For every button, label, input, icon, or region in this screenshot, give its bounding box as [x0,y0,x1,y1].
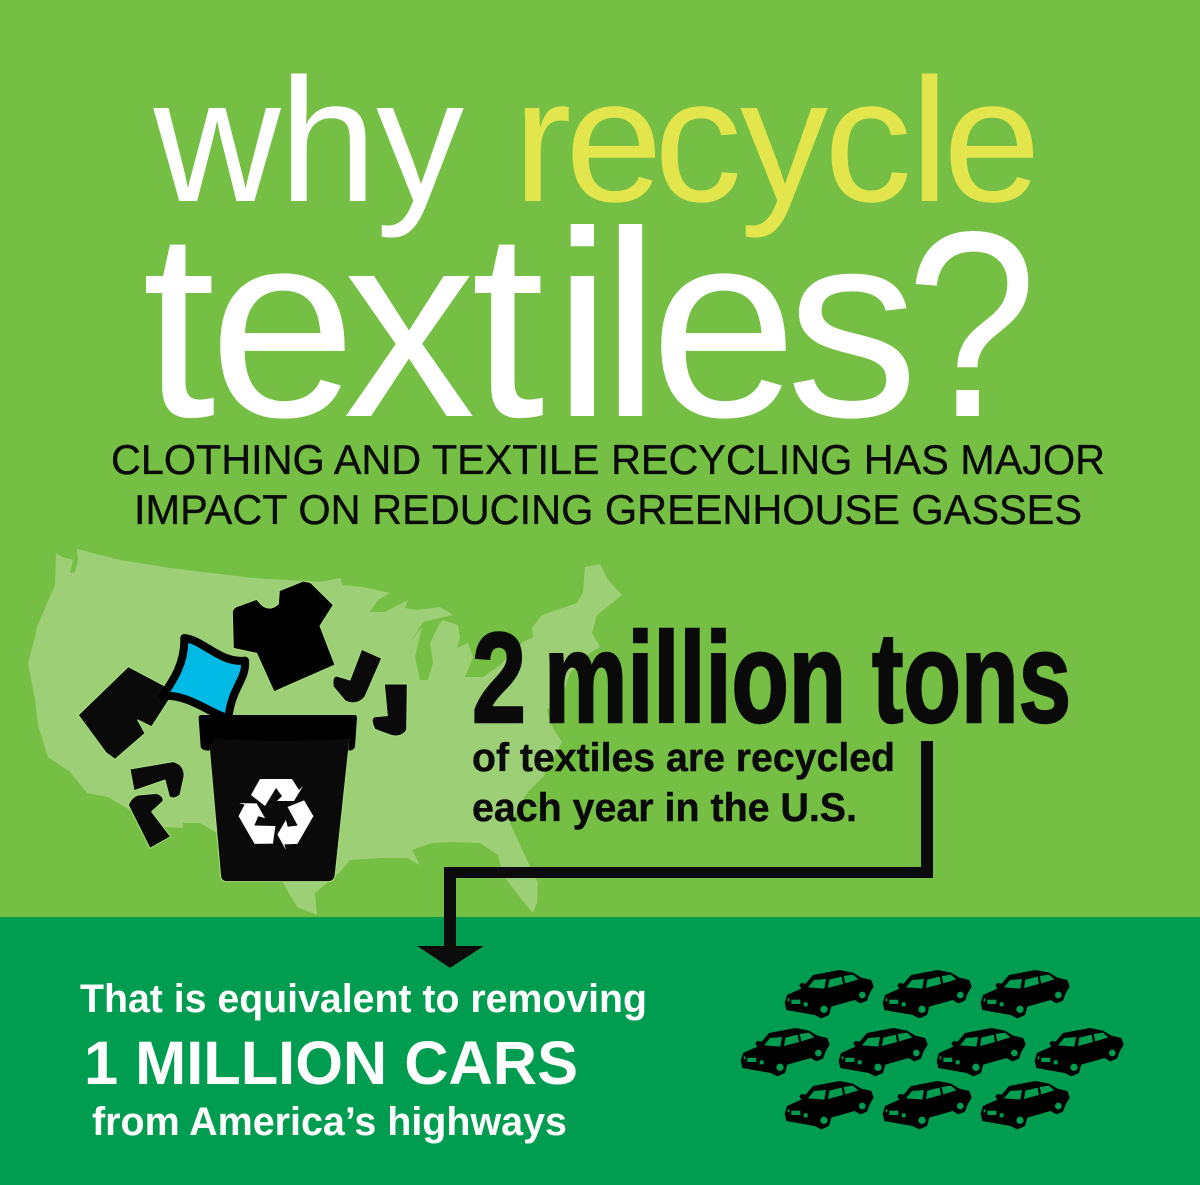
black elbow arrow [417,741,933,968]
title [142,43,1041,473]
icon: blue fabric [163,638,245,718]
map of the United States [28,549,622,915]
icon: sock right lower [372,684,407,736]
title: textiles [142,177,918,473]
title: recycle [513,43,1041,239]
subtitle: IMPACT ON REDUCING GREENHOUSE GASSES [134,486,1082,533]
statistic: 2 million tons: tons [872,607,1071,750]
lower band [0,917,1200,1185]
icon: recycling symbol [233,779,318,853]
equivalence text: 1 MILLION CARS [84,1029,578,1097]
icon: sock right upper [333,649,382,703]
statistic: 2 million tons [472,607,1071,750]
statistic description [472,736,895,830]
illustration: clothes and recycling bin [78,581,407,882]
icon: recycling bin [199,715,357,882]
icon: sock left lower [128,793,171,848]
statistic description: of textiles are recycled [472,736,895,780]
subtitle: CLOTHING AND TEXTILE RECYCLING HAS MAJOR [111,436,1105,483]
subtitle [111,436,1105,533]
statistic: 2 million tons: million [544,607,846,750]
title: ? [906,177,1037,473]
statistic description: each year in the U.S. [472,786,857,830]
equivalence text [80,977,647,1144]
equivalence text: from America’s highways [92,1100,567,1144]
icon: shorts [78,667,170,759]
equivalence text: That is equivalent to removing [80,977,647,1021]
icon: sock left upper [130,762,184,798]
icon group: ten cars [741,970,1124,1129]
title: why [152,43,464,239]
icon: t-shirt [232,581,335,692]
statistic: 2 million tons: 2 [472,607,526,750]
